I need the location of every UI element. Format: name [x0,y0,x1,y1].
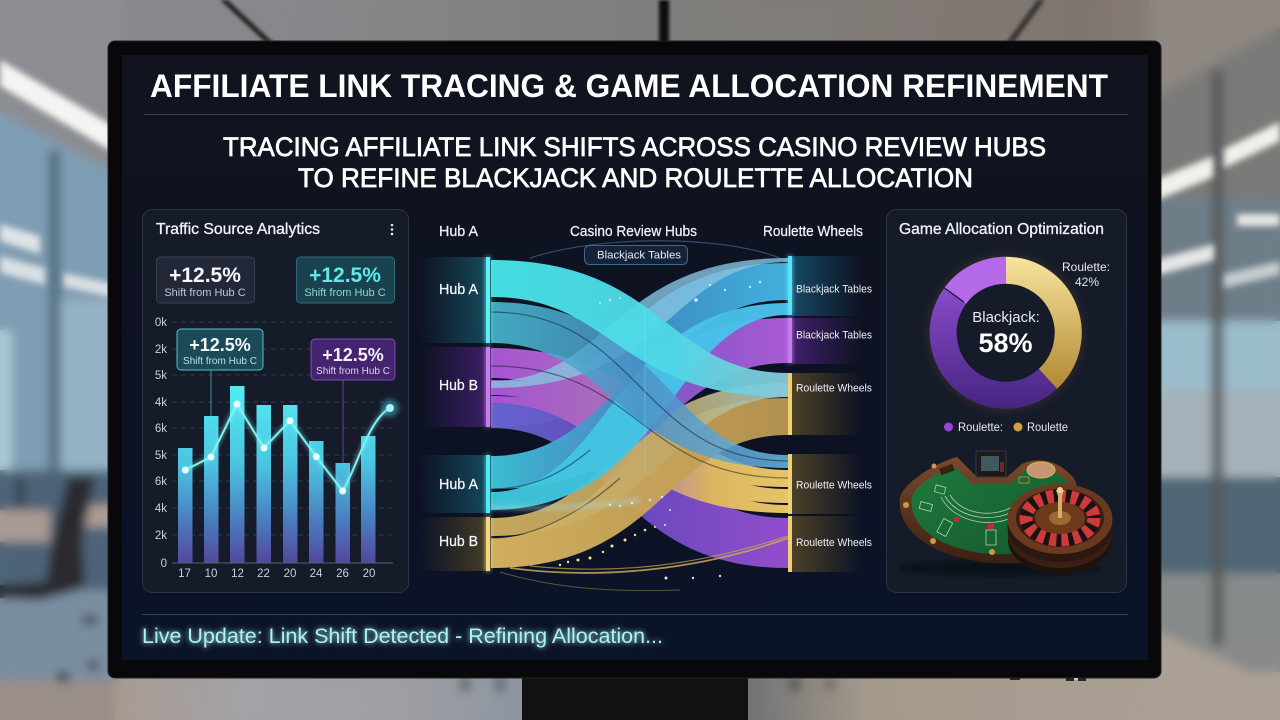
stat card: teal: +12.5% [309,264,381,287]
y axis labels: 5k [155,450,167,462]
callout: teal [177,329,263,416]
faint top link lines [530,241,780,258]
monitor bottom controls [1010,678,1086,681]
x axis labels [178,568,375,580]
callout: purple [311,339,395,463]
sankey column headers: Casino Review Hubs [570,224,697,240]
donut center label: 58% [978,328,1033,358]
panel: game allocation optimization [886,210,1126,592]
right destination labels [796,284,872,549]
y axis labels: 4k [155,397,167,409]
right destination labels: Roulette Wheels [796,480,872,492]
x axis labels: 26 [336,568,349,580]
subtitle: TO REFINE BLACKJACK AND ROULETTE ALLOCATION [298,163,973,193]
dark seams between flows [491,312,788,538]
left hub labels: Hub B [439,378,478,394]
donut center label: Blackjack: [972,309,1040,326]
y axis labels: 0k [155,317,167,329]
segment: roulette gold [1006,270,1068,379]
sankey diagram [420,224,872,591]
panel heading: Traffic Source Analytics [156,221,320,238]
y axis labels: 4k [155,503,167,515]
donut center label [972,309,1040,358]
sankey left nodes [486,257,490,571]
left hub labels: Hub A [439,282,478,298]
sankey column headers: Roulette Wheels [763,224,863,240]
roulette share label: Roulette: [1062,260,1110,274]
live update ticker: Live Update: Link Shift Detected - Refining Allocation... [142,624,663,648]
stat card: teal [296,257,394,303]
monitor stand [522,676,748,720]
right destination labels: Blackjack Tables [796,330,872,342]
monitor screen [122,55,1148,660]
y axis labels: 5k [155,370,167,382]
title: AFFILIATE LINK TRACING & GAME ALLOCATION REFINEMENT [150,68,1108,104]
y axis labels: 6k [155,476,167,488]
trend line [182,399,399,494]
sankey column headers [439,224,863,240]
chip tray [976,451,1006,477]
sankey right nodes [788,256,792,572]
monitor bezel [108,41,1161,678]
donut legend: Roulette [1027,420,1068,434]
sankey column headers: Hub A [439,224,478,240]
pill label: blackjack tables: Blackjack Tables [597,250,682,262]
blackjack table [900,451,1077,563]
x axis labels: 12 [231,568,244,580]
panel heading: Game Allocation Optimization [899,221,1104,238]
sparkle particles [559,526,656,566]
pill label: blackjack tables [584,246,688,264]
y axis labels: 2k [155,530,167,542]
callout: purple: Shift from Hub C [316,366,390,377]
bar chart [178,386,376,563]
stat card: grey [156,257,254,303]
donut chart [936,263,1076,403]
right destination labels: Roulette Wheels [796,382,872,394]
x axis labels: 10 [205,568,217,580]
donut legend: Roulette: [958,420,1003,434]
left hub labels: Hub A [439,477,478,493]
right destination labels: Blackjack Tables [796,284,872,296]
roulette share label: 42% [1075,275,1099,289]
callout: teal: Shift from Hub C [183,356,257,367]
node glows [420,256,862,572]
x axis labels: 22 [257,568,270,580]
y axis labels [155,317,167,570]
y axis labels: 6k [155,423,167,435]
segment: blackjack purple [943,296,1048,395]
gold and pale strands [491,310,788,591]
roulette share label [1062,260,1110,289]
subtitle: TRACING AFFILIATE LINK SHIFTS ACROSS CASINO REVIEW HUBS [223,132,1046,162]
sankey flows [491,258,788,568]
segment: light purple [955,270,1006,296]
donut legend [944,420,1068,434]
x axis labels: 24 [310,568,323,580]
left hub labels: Hub B [439,534,478,550]
left hub labels [439,282,478,550]
callout: teal: +12.5% [189,335,251,355]
panel: traffic source analytics [142,210,408,592]
subtitle [223,132,1046,193]
callout: purple: +12.5% [322,345,384,365]
roulette wheel [1008,484,1112,574]
monitor [108,41,1161,678]
icon: menu dots [391,224,393,235]
x axis labels: 20 [363,568,375,580]
stat card: teal: Shift from Hub C [304,287,386,299]
chart gridlines [172,322,392,535]
stat card: grey: +12.5% [169,264,241,287]
x axis labels: 20 [284,568,296,580]
x axis labels: 17 [178,568,191,580]
y axis labels: 2k [155,344,167,356]
y axis labels: 0 [161,558,167,570]
right destination labels: Roulette Wheels [796,537,872,549]
illustration: blackjack table and roulette wheel [900,451,1112,575]
stat card: grey: Shift from Hub C [164,287,246,299]
